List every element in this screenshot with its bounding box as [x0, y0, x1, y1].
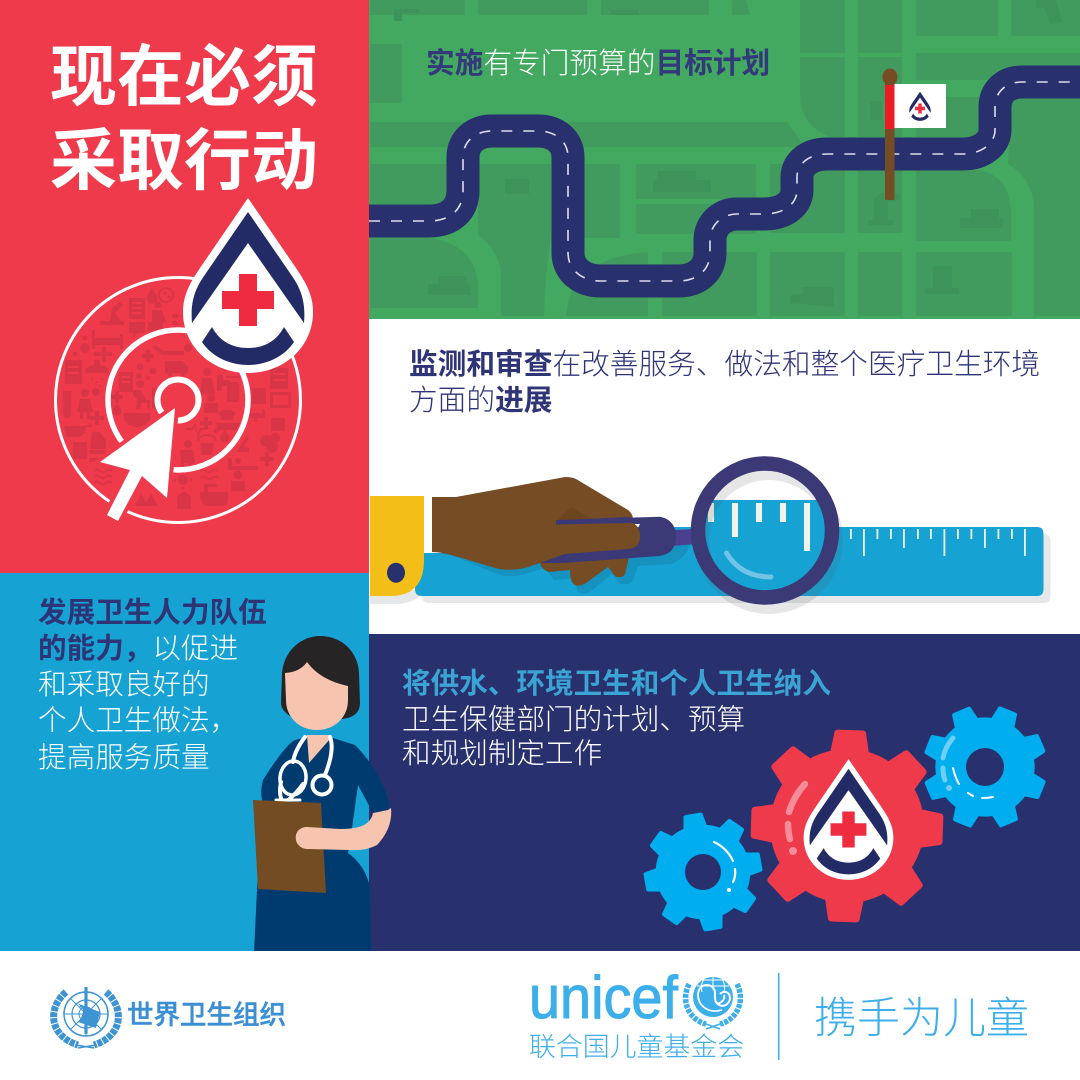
divider: [778, 973, 780, 1060]
magnifier lens shadow: [702, 473, 836, 607]
ruler: [415, 527, 1044, 596]
text: WASH integration: 和规划制定工作: [402, 738, 602, 770]
text: WASH integration: 将供水、环境卫生和个人卫生纳入: [402, 668, 831, 700]
logo text: WHO: 世界卫生组织: [127, 1000, 286, 1030]
text: workforce capacity: 和采取良好的: [38, 669, 210, 701]
icon: target rings: [56, 278, 300, 522]
arm: [296, 808, 391, 850]
icon: blue gear right: [904, 686, 1066, 848]
hand shadow on ruler: [436, 544, 690, 594]
text: WASH integration: 卫生保健部门的计划、预算: [402, 704, 745, 736]
icon: click cursor arrow: [100, 408, 175, 521]
logo: unicef wordmark: unicef: [529, 964, 678, 1031]
dress: [254, 737, 389, 952]
hair back: [281, 636, 360, 719]
text: WASH integration: [402, 668, 831, 770]
magnifier stick: [673, 529, 696, 546]
panel: build workforce capacity: [0, 573, 369, 951]
text: workforce capacity: 个人卫生做法，: [38, 705, 238, 737]
icon: doctor with clipboard: [253, 636, 391, 952]
footer band: [0, 951, 1080, 1080]
icon: healthcare icons pattern inside target: [63, 288, 291, 509]
text: workforce capacity: 发展卫生人力队伍: [38, 597, 267, 629]
title: 现在必须: [50, 40, 318, 115]
hand with magnifier grip: [432, 477, 676, 586]
text: monitor and review: 监测和审查在改善服务、做法和整个医疗卫生环境: [409, 349, 1040, 381]
title: [50, 40, 318, 199]
icon: water and health drop: [183, 198, 313, 373]
icon: blue gear left: [635, 804, 771, 940]
map blocks: [370, 0, 1080, 316]
magnifier lens: [695, 464, 836, 607]
text: workforce capacity: [38, 597, 267, 774]
text: workforce capacity: 的能力，以促进: [38, 633, 238, 665]
stethoscope: [276, 737, 332, 801]
panel: integrate WASH into planning: [369, 634, 1080, 951]
neck: [307, 735, 330, 763]
cuff: [370, 496, 424, 596]
map buildings: [394, 0, 1062, 307]
panel: implement budgeted plan, city map: [369, 0, 1080, 319]
icon: red gear with drop: [748, 727, 946, 925]
ruler and cuff shadow: [370, 534, 1050, 604]
panel: monitor and review: [370, 348, 1050, 614]
logo: unicef emblem: [686, 977, 740, 1029]
winding road: [369, 82, 1080, 281]
logo text: unicef Chinese: 联合国儿童基金会: [529, 1032, 744, 1062]
clipboard: [253, 800, 326, 893]
text: workforce capacity: 提高服务质量: [38, 742, 210, 774]
text: monitor and review: [409, 349, 1040, 417]
text: monitor and review: 方面的进展: [409, 385, 552, 417]
heading: implement: 实施有专门预算的目标计划: [426, 48, 770, 80]
face: [285, 662, 348, 730]
logo: WHO emblem: [54, 987, 118, 1048]
icon: flag on road: [877, 68, 946, 202]
title: 采取行动: [50, 124, 318, 199]
panel: red action panel: [0, 0, 369, 573]
tagline: 携手为儿童: [814, 995, 1029, 1043]
